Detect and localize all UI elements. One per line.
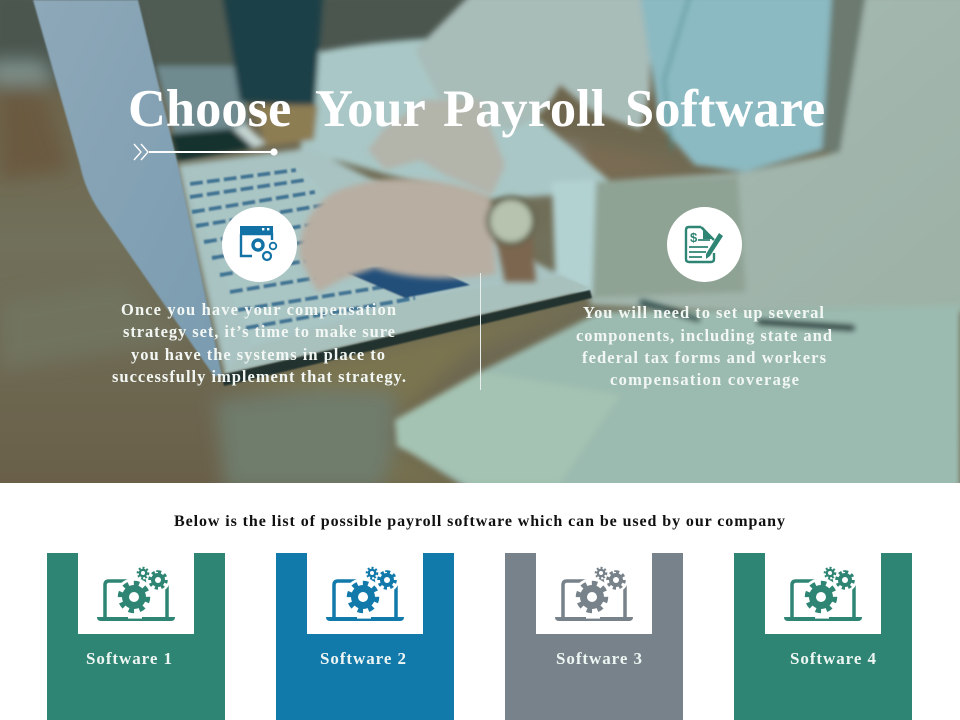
card: software 3: Software 3 [556, 649, 642, 668]
card: software 1 [47, 553, 225, 720]
card: software 4: Software 4 [790, 649, 876, 668]
text block: left: you have the systems in place to [131, 345, 385, 364]
title: Your [315, 80, 426, 138]
white lower band [0, 483, 960, 720]
card: software 1: Software 1 [86, 649, 172, 668]
card: software 2: Software 2 [320, 649, 406, 668]
card: software 3 [505, 553, 683, 720]
title: Choose [128, 80, 291, 138]
background photo: laptop, hands and notebook on wooden desk [0, 0, 960, 490]
title: Payroll [443, 80, 605, 138]
text block: right [576, 303, 832, 389]
title: Software [625, 80, 825, 138]
text block: left: strategy set, it’s time to make sure [123, 322, 395, 341]
text block: right: You will need to set up several [583, 303, 824, 322]
text block: left: successfully implement that strategy. [112, 367, 406, 386]
text block: right: federal tax forms and workers [582, 348, 827, 367]
arrow underline [134, 144, 278, 160]
text block: left: Once you have your compensation [121, 300, 396, 319]
icon: payroll document and pen [667, 207, 742, 282]
text block: right: compensation coverage [610, 370, 799, 389]
text block: left [112, 300, 406, 386]
laptop lid [33, 0, 222, 376]
icon: software window with gears [222, 207, 297, 282]
text block: right: components, including state and [576, 326, 832, 345]
caption: Below is the list of possible payroll software which can be used by our company [174, 513, 785, 530]
card: software 4 [734, 553, 912, 720]
card: software 2 [276, 553, 454, 720]
divider line [480, 273, 481, 390]
icon: payroll document and pen: $ [690, 230, 698, 245]
